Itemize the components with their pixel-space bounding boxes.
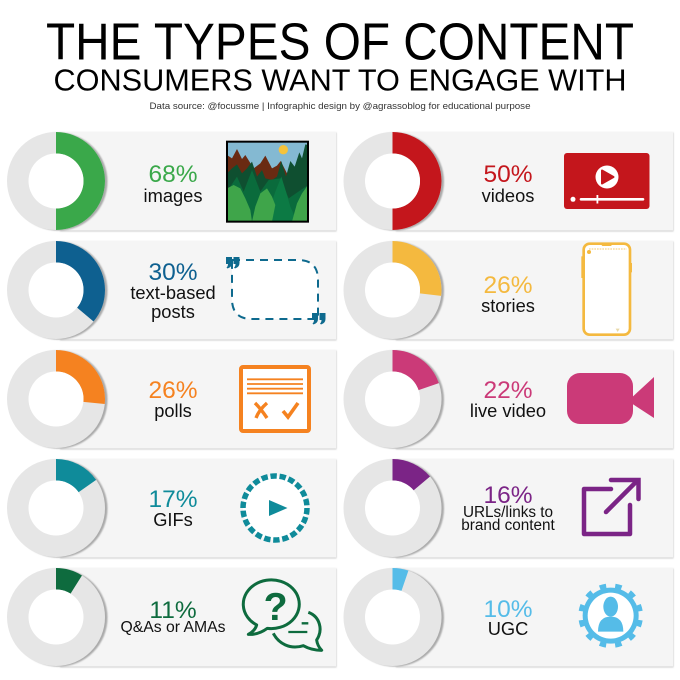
icon: smartphone [581, 243, 632, 335]
donut: URLs/links 16% [344, 459, 444, 558]
subtitle: CONSUMERS WANT TO ENGAGE WITH [54, 62, 626, 98]
panel: images [7, 132, 336, 232]
value: 17% GIFs [148, 486, 198, 530]
donut: text-based posts 30% [7, 241, 108, 340]
icon: poll form [241, 367, 309, 431]
donut: stories 26% [344, 241, 444, 340]
panel: text-based posts [7, 241, 336, 340]
icon: dashed quote bubble [226, 257, 326, 324]
value: 16% URLs/links to brand content: 16% [483, 482, 533, 509]
value: 68% images [144, 161, 202, 206]
value: 26% polls: 26% [148, 377, 198, 404]
value: 68% images: 68% [148, 161, 198, 188]
value: 16% URLs/links to brand content: brand content [461, 517, 556, 534]
value: 26% polls: polls [154, 400, 192, 421]
value: 30% text-based posts: posts [151, 301, 195, 322]
donut: images 68% [7, 132, 108, 231]
donut: videos 50% [344, 132, 444, 231]
panel: stories [344, 241, 674, 340]
panel: live video [344, 350, 674, 450]
header [46, 14, 634, 111]
panel: videos [344, 132, 674, 232]
panel: URLs/links [344, 459, 674, 558]
value: 11% Q&As or AMAs: Q&As or AMAs [120, 619, 226, 636]
source credit: Data source: @focussme | Infographic design by @agrassoblog for educational purpose [150, 100, 530, 111]
value: 22% live video [470, 377, 546, 421]
value: 11% Q&As or AMAs [120, 597, 226, 636]
value: 26% stories [481, 272, 535, 316]
value: 50% videos [482, 161, 534, 206]
icon: question speech bubbles: ? [264, 585, 288, 629]
value: 26% stories: 26% [483, 272, 533, 299]
icon: video player [564, 153, 650, 209]
panel: Q&As or AMAs [7, 568, 336, 668]
icon: external link [584, 480, 638, 534]
icon: question speech bubbles [243, 580, 322, 650]
value: 17% GIFs: GIFs [153, 509, 193, 530]
panel: UGC [344, 568, 674, 668]
value: 22% live video: 22% [483, 377, 533, 404]
icon: dashed play circle [243, 476, 307, 540]
value: 30% text-based posts: 30% [148, 259, 198, 286]
value: 16% URLs/links to brand content [461, 482, 556, 534]
panel: polls [7, 350, 336, 450]
value: 22% live video: live video [470, 400, 546, 421]
donut: Q&As 11% [7, 568, 108, 667]
value: 17% GIFs: 17% [148, 486, 198, 513]
icon: video camera [567, 373, 654, 424]
value: 10% UGC [483, 596, 533, 639]
title: THE TYPES OF CONTENT [46, 14, 634, 72]
donut: GIFs 17% [7, 459, 108, 558]
value: 50% videos: videos [482, 185, 534, 206]
value: 10% UGC: 10% [483, 596, 533, 623]
value: 16% URLs/links to brand content: URLs/links to [463, 504, 553, 521]
icon: gear with user [577, 582, 644, 649]
donut: UGC 10% [344, 568, 444, 667]
donut: live video 22% [344, 350, 444, 449]
value: 11% Q&As or AMAs: 11% [149, 597, 197, 624]
value: 26% stories: stories [481, 295, 535, 316]
value: 26% polls [148, 377, 198, 421]
value: 50% videos: 50% [483, 161, 533, 188]
value: 30% text-based posts [130, 259, 216, 322]
icon: forest picture [227, 142, 308, 222]
value: 68% images: images [144, 185, 202, 206]
panel: GIFs [7, 459, 336, 558]
value: 30% text-based posts: text-based [130, 282, 216, 303]
value: 10% UGC: UGC [488, 618, 528, 639]
donut: polls 26% [7, 350, 108, 449]
